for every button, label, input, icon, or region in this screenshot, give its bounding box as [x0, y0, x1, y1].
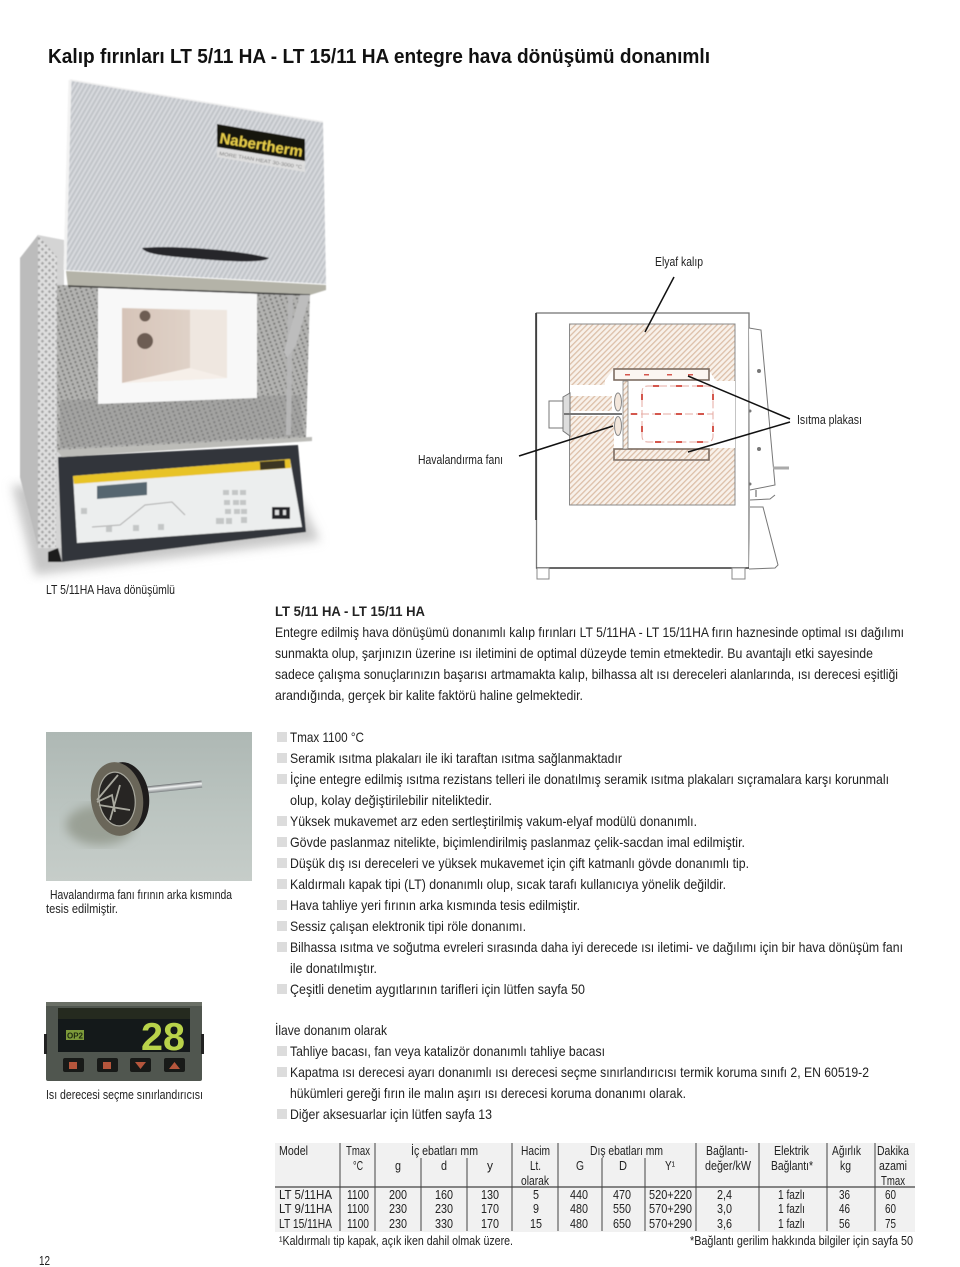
table row: LT 15/11HA: 480 [570, 1217, 588, 1231]
floor shadow [12, 485, 320, 575]
table row: LT 9/11HA: 570+290 [649, 1202, 692, 1216]
table header: Bağlantı- [706, 1144, 748, 1158]
table header: değer/kW [705, 1159, 751, 1173]
interior mesh [57, 285, 310, 452]
table row: LT 5/11HA: LT 5/11HA [279, 1188, 333, 1202]
caption: ventilation fan [46, 888, 232, 916]
table row: LT 9/11HA: 480 [570, 1202, 588, 1216]
housing feet [537, 568, 549, 579]
door lower rail [66, 271, 326, 295]
power switch [272, 507, 290, 519]
table header: azami [879, 1159, 907, 1173]
bullet list: features: Tmax 1100 °C [290, 729, 364, 745]
table row: LT 9/11HA: LT 9/11HA [279, 1202, 333, 1216]
bullet list: features [277, 729, 903, 997]
side panel [20, 235, 64, 548]
table header: d [441, 1159, 447, 1173]
photo: ventilation fan [46, 732, 252, 881]
bullet list: features: Hava tahliye yeri fırının arka kısmında tesis edilmiştir. [290, 897, 580, 913]
door lid [65, 80, 326, 284]
table header: G [576, 1159, 584, 1173]
table row: LT 15/11HA: 330 [435, 1217, 453, 1231]
table row: LT 5/11HA: 60 [885, 1188, 896, 1202]
label: heating plate: Isıtma plakası [797, 413, 862, 427]
table header: °C [353, 1159, 363, 1173]
cavity holes [140, 310, 150, 322]
text block: optional equipment: Tahliye bacası, fan veya katalizör donanımlı tahliye bacası [290, 1043, 605, 1059]
text block: introduction: arandığında, gerçek bir kalite faktörü haline gelmektedir. [275, 687, 583, 703]
bullet list: features: Gövde paslanmaz nitelikte, biçimlendirilmiş paslanmaz çelik-sacdan imal edilmiştir. [290, 834, 745, 850]
photo: temperature limiter: 28 [141, 1016, 185, 1059]
table row: LT 15/11HA: 15 [530, 1217, 542, 1231]
table header: Ağırlık [832, 1144, 862, 1158]
furnace cavity [122, 308, 227, 383]
table header: Tmax [881, 1174, 906, 1188]
table header: Tmax [346, 1144, 371, 1158]
insulation block [570, 324, 735, 505]
footnote: lift door: ¹Kaldırmalı tip kapak, açık iken dahil olmak üzere. [279, 1234, 513, 1248]
outer housing [536, 313, 749, 568]
display [97, 482, 147, 499]
photo: furnace with open lift door: Nabertherm [218, 130, 304, 161]
caption: ventilation fan: tesis edilmiştir. [46, 902, 118, 916]
table row: LT 5/11HA: 1 fazlı [778, 1188, 805, 1202]
bullet list: features: ile donatılmıştır. [290, 960, 377, 976]
caption: ventilation fan: Havalandırma fanı fırının arka kısmında [50, 888, 232, 902]
table row: LT 9/11HA: 9 [533, 1202, 539, 1216]
program curve [92, 502, 185, 527]
leader line: lower heating plate [688, 422, 790, 452]
table row: LT 15/11HA: 3,6 [717, 1217, 732, 1231]
air flow arrows [630, 386, 713, 442]
chamber [570, 369, 735, 461]
bullet list: features: Düşük dış ısı dereceleri ve yüksek mukavemet için çift katmanlı gövde donanımlı tip. [290, 855, 749, 871]
text block: optional equipment: İlave donanım olarak [275, 1021, 388, 1038]
table row: LT 5/11HA: 520+220 [649, 1188, 692, 1202]
control panel [73, 459, 302, 543]
table header: Lt. [530, 1159, 541, 1173]
right arm [286, 295, 293, 435]
table row: LT 5/11HA: 200 [389, 1188, 407, 1202]
table row: LT 5/11HA: 130 [481, 1188, 499, 1202]
table row: LT 15/11HA: 570+290 [649, 1217, 692, 1231]
table row: LT 9/11HA: 60 [885, 1202, 896, 1216]
table row: LT 5/11HA: 1100 [347, 1188, 369, 1202]
top heating plate [614, 369, 709, 380]
label: fibre module: Elyaf kalıp [655, 255, 703, 269]
table header: Elektrik [774, 1144, 810, 1158]
table header: Bağlantı* [771, 1159, 813, 1173]
table header: Dış ebatları mm [590, 1144, 663, 1158]
table row: LT 9/11HA: 1100 [347, 1202, 369, 1216]
bullet list: features: İçine entegre edilmiş ısıtma rezistans telleri ile donatılmış seramik ısıtma plakaları sıçramalara karşı korunmalı [290, 770, 889, 787]
table row: LT 15/11HA: 170 [481, 1217, 499, 1231]
caption: furnace photo: LT 5/11HA Hava dönüşümlü [46, 583, 175, 597]
bullet list: features: Kaldırmalı kapak tipi (LT) donanımlı olup, sıcak tarafı kullanıcıya yönelik değildir. [290, 876, 726, 892]
text block: optional equipment: Kapatma ısı derecesi ayarı donanımlı ısı derecesi seçme sınırlandırıcısı termik koruma sınıfı 2, EN 60519-2 [290, 1064, 869, 1080]
table row: LT 9/11HA: 46 [839, 1202, 850, 1216]
caption: temperature limiter: Isı derecesi seçme sınırlandırıcısı [46, 1088, 203, 1102]
table header: olarak [521, 1174, 550, 1188]
table row: LT 9/11HA: 170 [481, 1202, 499, 1216]
bullet list: features: olup, kolay değiştirilebilir niteliktedir. [290, 792, 492, 808]
text block: introduction [275, 603, 904, 703]
table header: y [487, 1159, 494, 1173]
photo: temperature limiter [44, 1002, 204, 1081]
table header: kg [840, 1159, 851, 1173]
table header: İç ebatları mm [411, 1144, 478, 1158]
table row: LT 5/11HA: 2,4 [717, 1188, 732, 1202]
bullet list: features: Seramik ısıtma plakaları ile iki taraftan ısıtma sağlanmaktadır [290, 750, 622, 766]
fan blades [614, 393, 622, 411]
table row: LT 5/11HA: 160 [435, 1188, 453, 1202]
table row: LT 9/11HA: 3,0 [717, 1202, 732, 1216]
control base [58, 445, 306, 562]
table: technical data [275, 1143, 915, 1232]
table header: g [395, 1159, 401, 1173]
bottom heating plate [614, 449, 709, 460]
table row: LT 15/11HA: 1 fazlı [778, 1217, 805, 1231]
photo: furnace with open lift door: MORE THAN HEAT 30-3000 °C [219, 151, 303, 171]
label: ventilation fan: Havalandırma fanı [418, 453, 503, 467]
keypad [81, 490, 247, 532]
table row: LT 9/11HA [279, 1202, 896, 1216]
section drawing: furnace cross section [536, 313, 789, 579]
fan housing hatch [570, 396, 612, 411]
table row: LT 5/11HA [279, 1188, 896, 1202]
door handle [142, 247, 269, 261]
text block: introduction: sunmakta olup, şarjınızın üzerine ısı iletimini de optimal düzeyde temin etmektedir. Bu avantajlı etki sayesinde [275, 645, 873, 661]
table row: LT 15/11HA: 650 [613, 1217, 631, 1231]
table header: D [619, 1159, 627, 1173]
leader line: fan [519, 426, 613, 456]
table header: Y¹ [665, 1159, 675, 1173]
logo plate [217, 124, 305, 172]
table row: LT 15/11HA: LT 15/11HA [279, 1217, 333, 1231]
photo: temperature limiter: OP2 [67, 1032, 84, 1040]
shelf [57, 437, 312, 457]
text block: optional equipment: hükümleri gereği fırın ile malın aşırı ısı derecesi koruma donanımı olarak. [290, 1085, 686, 1101]
table row: LT 15/11HA: 56 [839, 1217, 850, 1231]
leader line: upper heating plate [688, 376, 790, 419]
text block: optional equipment [275, 1021, 869, 1122]
text block: introduction: LT 5/11 HA - LT 15/11 HA [275, 603, 425, 619]
table row: LT 9/11HA: 230 [435, 1202, 453, 1216]
back wall [623, 381, 628, 449]
footnote: connection voltage: *Bağlantı gerilim hakkında bilgiler için sayfa 50 [690, 1234, 913, 1248]
leader line: fibre module [645, 277, 674, 332]
table header: Hacim [521, 1144, 550, 1158]
bullet list: features: Yüksek mukavemet arz eden sertleştirilmiş vakum-elyaf modülü donanımlı. [290, 813, 697, 829]
table row: LT 15/11HA [279, 1217, 896, 1231]
table row: LT 9/11HA: 230 [389, 1202, 407, 1216]
table row: LT 5/11HA: 36 [839, 1188, 850, 1202]
table row: LT 5/11HA: 5 [533, 1188, 539, 1202]
door and hinge side [749, 328, 778, 569]
table header: Dakika [877, 1144, 909, 1158]
table row: LT 9/11HA: 550 [613, 1202, 631, 1216]
table header: Model [279, 1144, 308, 1158]
bullet list: features: Sessiz çalışan elektronik tipi röle donanımı. [290, 918, 526, 934]
white insulation [98, 287, 257, 404]
table row: LT 15/11HA: 75 [885, 1217, 896, 1231]
photo: furnace with open lift door [12, 80, 326, 575]
bullet list: features: Çeşitli denetim aygıtlarının tarifleri için lütfen sayfa 50 [290, 981, 585, 997]
table row: LT 9/11HA: 1 fazlı [778, 1202, 805, 1216]
table header [279, 1144, 909, 1188]
table row: LT 15/11HA: 230 [389, 1217, 407, 1231]
table row: LT 5/11HA: 470 [613, 1188, 631, 1202]
title: Kalıp fırınları LT 5/11 HA - LT 15/11 HA entegre hava dönüşümü donanımlı [48, 46, 710, 68]
table row: LT 15/11HA: 1100 [347, 1217, 369, 1231]
text block: optional equipment: Diğer aksesuarlar için lütfen sayfa 13 [290, 1106, 492, 1122]
table row: LT 5/11HA: 440 [570, 1188, 588, 1202]
